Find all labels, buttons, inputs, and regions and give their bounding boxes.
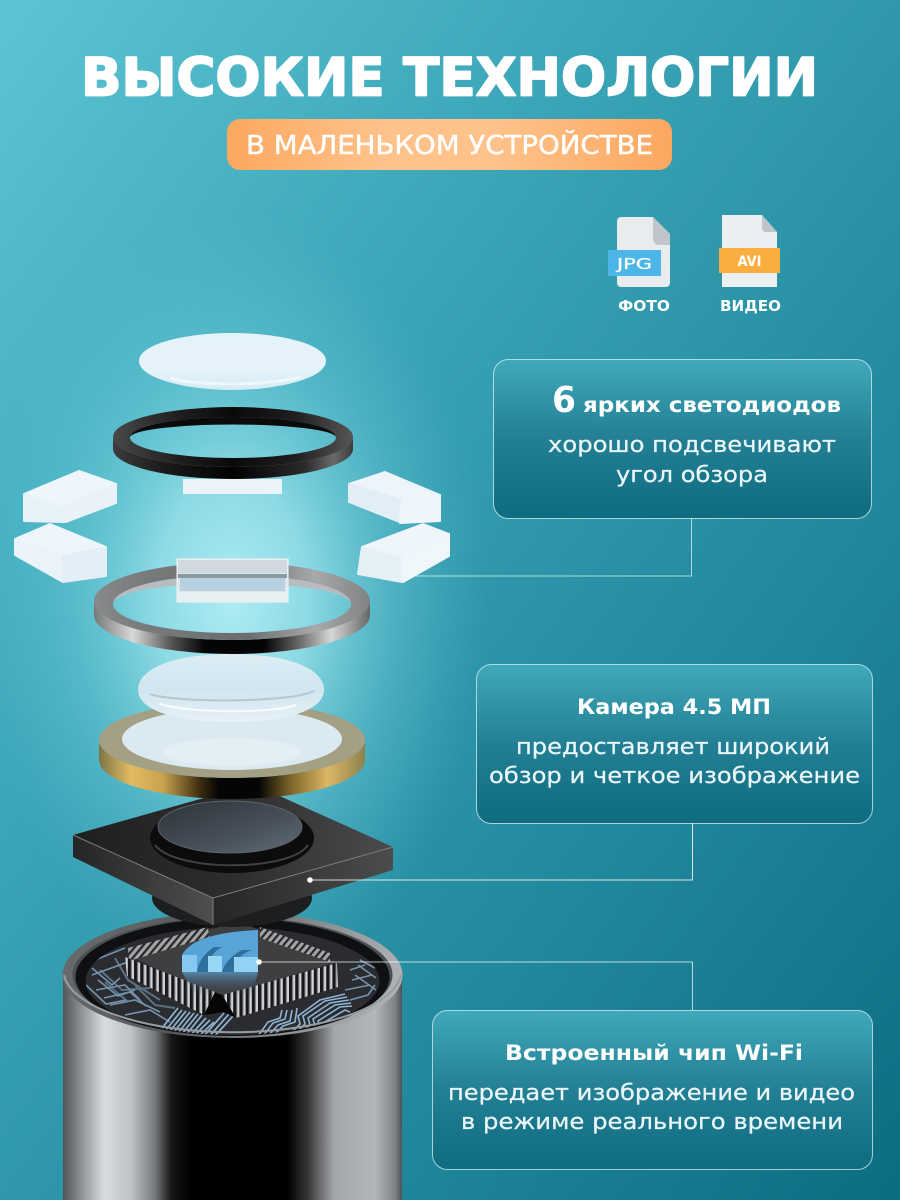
- camera pointer dot: [307, 877, 313, 883]
- card 2 body line 1: предоставляет широкий: [516, 734, 830, 760]
- icon: AVI video file: [719, 215, 780, 287]
- silver ring: [94, 562, 370, 654]
- LED block: bottom right: [358, 524, 449, 582]
- circuit board: [86, 927, 380, 1038]
- chip body: [128, 921, 336, 998]
- card: camera: [476, 664, 872, 824]
- wifi pointer dot: [256, 959, 262, 965]
- under-dome sensor bottom: [152, 869, 312, 927]
- chip pins back right: [260, 927, 330, 962]
- icon: JPG photo file: JPG: [616, 255, 652, 273]
- card 1 body line 2: угол обзора: [616, 462, 768, 488]
- chip pins front left: [125, 957, 215, 1015]
- label: photo: ФОТО: [618, 297, 670, 315]
- icon: JPG photo file: [608, 217, 670, 287]
- card: wifi chip: [432, 1010, 872, 1170]
- card 2 heading: Камера 4.5 МП: [577, 695, 771, 719]
- black ring: [113, 407, 353, 479]
- card 2 body line 2: обзор и четкое изображение: [489, 763, 860, 789]
- card 1 body line 1: хорошо подсвечивают: [548, 432, 836, 458]
- card 1 heading: ярких светодиодов: [583, 393, 841, 417]
- card 3 heading: Встроенный чип Wi-Fi: [505, 1041, 803, 1065]
- top lens: [139, 333, 326, 390]
- chip pins front right: [222, 963, 338, 1018]
- card 3 body line 2: в режиме реального времени: [461, 1109, 843, 1135]
- card 1 number: 6: [552, 380, 576, 421]
- connector: wifi chip to card: [259, 962, 692, 1010]
- connector: LEDs to card: [410, 518, 692, 576]
- lower lens: [138, 654, 324, 722]
- subtitle pill: В МАЛЕНЬКОМ УСТРОЙСТВЕ: [246, 129, 653, 161]
- camera module square plate: [73, 784, 393, 925]
- camera lens face: [158, 801, 302, 853]
- LED block: top left: [24, 471, 116, 522]
- chip pins back left: [128, 927, 209, 961]
- device body cylinder with PCB: [62, 912, 402, 1200]
- chip notch: [204, 992, 236, 1018]
- card: LEDs: [494, 360, 872, 518]
- title: ВЫСОКИЕ ТЕХНОЛОГИИ: [81, 48, 818, 108]
- subtitle pill: [227, 119, 672, 170]
- gold ring with lens glass: [99, 702, 365, 799]
- label: video: ВИДЕО: [720, 297, 781, 315]
- wifi icon on chip: [182, 930, 258, 996]
- LED block: top right: [349, 472, 440, 523]
- glass LED block on silver ring: [177, 559, 288, 602]
- LED under top ring: [183, 479, 282, 494]
- camera dome: [150, 803, 314, 873]
- LED block: bottom left: [15, 524, 106, 582]
- card 3 body line 1: передает изображение и видео: [448, 1080, 855, 1106]
- icon: AVI video file: AVI: [738, 254, 762, 270]
- connector: camera to card: [310, 823, 692, 880]
